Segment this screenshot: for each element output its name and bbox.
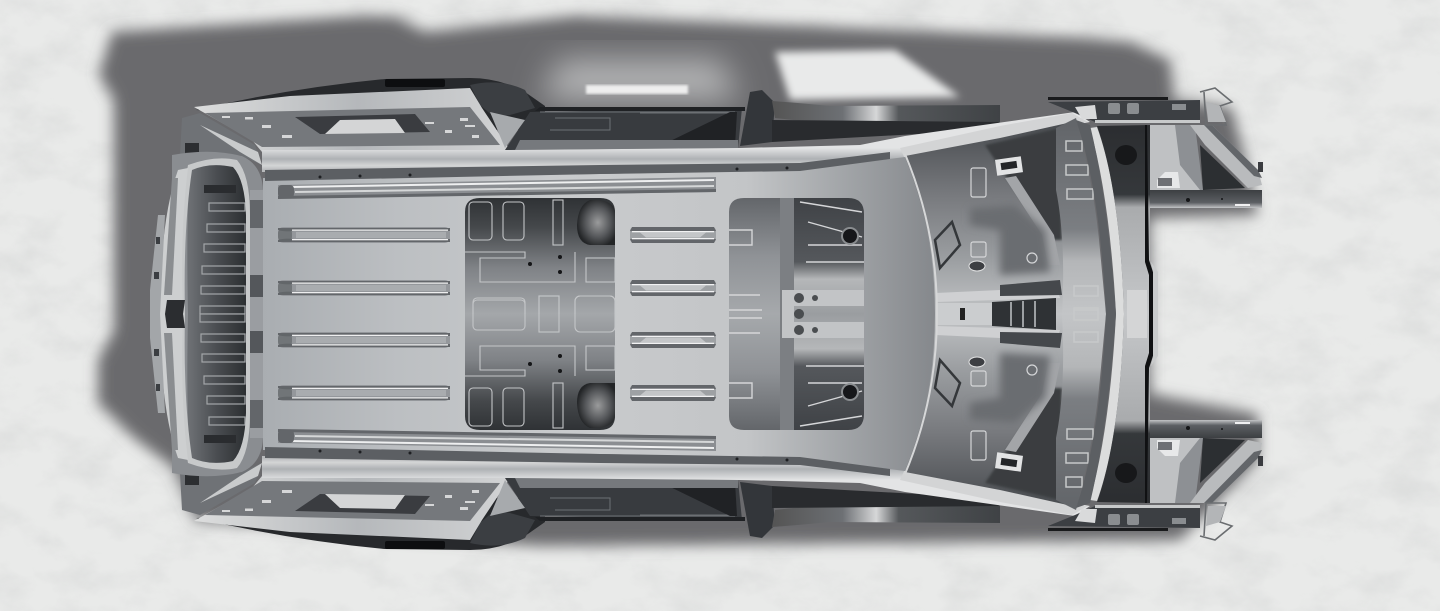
rear window light patch	[586, 85, 688, 94]
car body, lower half mirrored	[150, 296, 1263, 550]
cast shadow	[98, 16, 1258, 546]
gaps in shadow	[775, 50, 960, 100]
car body, upper half	[150, 78, 1263, 332]
light falloff around shadow centre	[540, 60, 740, 100]
